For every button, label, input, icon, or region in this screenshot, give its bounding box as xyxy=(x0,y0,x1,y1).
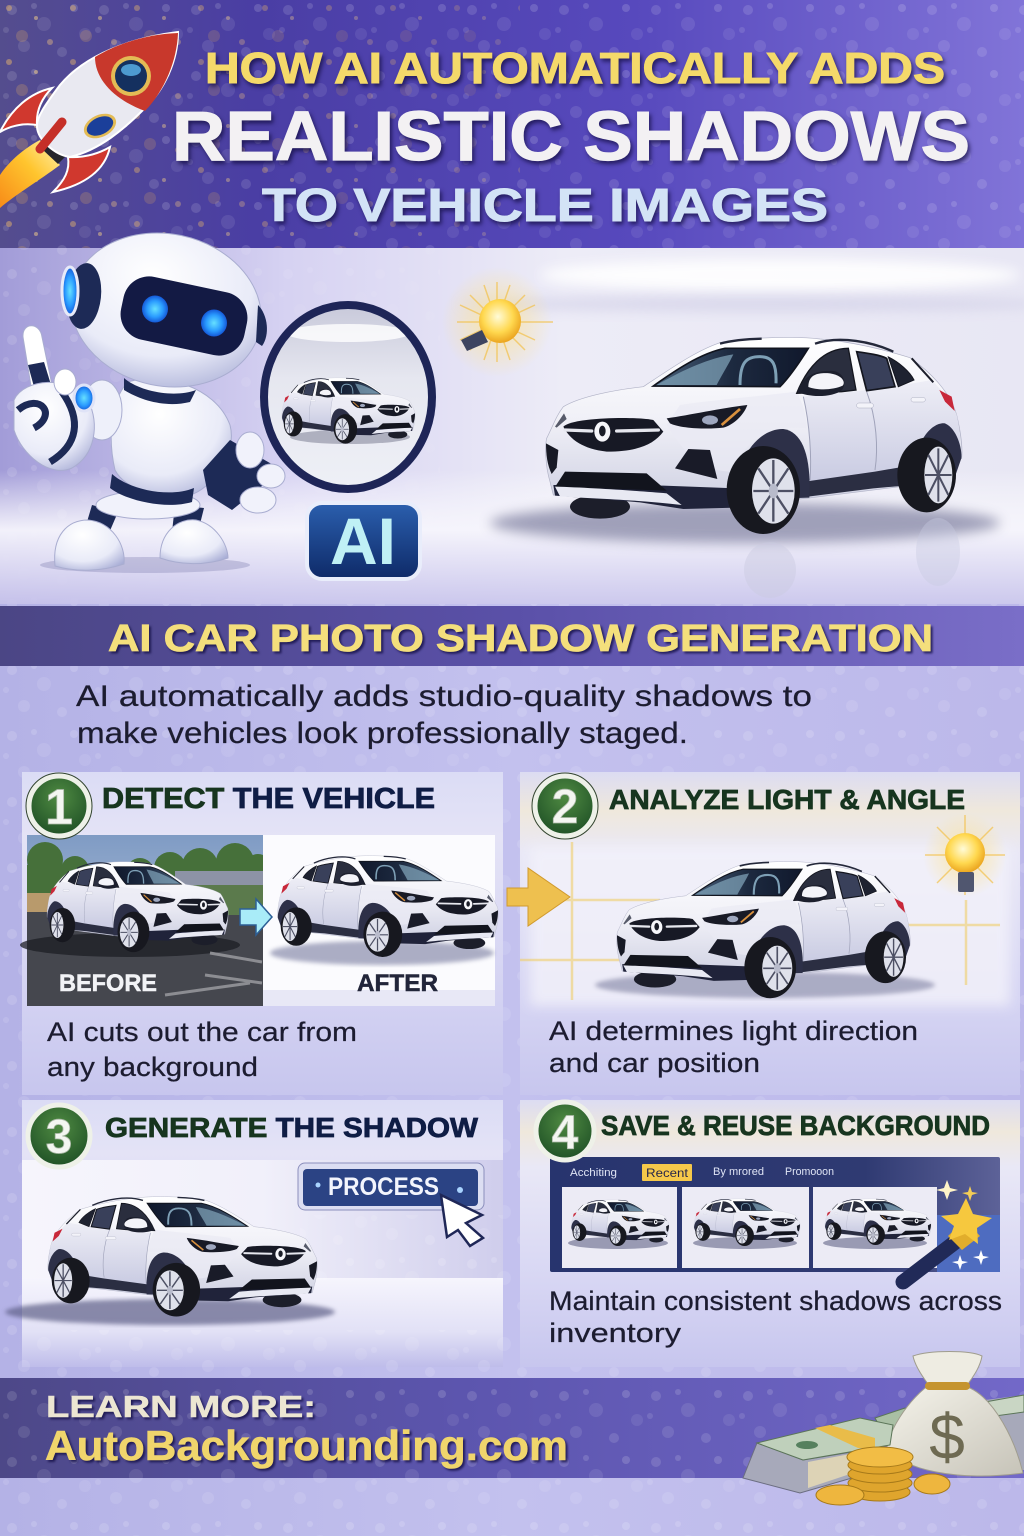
section banner: AI CAR PHOTO SHADOW GENERATION xyxy=(108,618,933,660)
step 2 description: and car position xyxy=(549,1048,760,1078)
header band xyxy=(0,0,1024,248)
robot waist xyxy=(110,474,194,505)
light guide lines xyxy=(520,842,1010,1006)
icon: cash and coins with money bag xyxy=(743,1352,1024,1505)
step 2 description xyxy=(549,1016,918,1078)
step 2 description: AI determines light direction xyxy=(549,1016,918,1046)
panel: step 2 xyxy=(507,772,1020,1095)
call to action text xyxy=(45,1389,568,1469)
illustration: robot xyxy=(14,216,285,573)
tabs: Promooon xyxy=(785,1166,834,1178)
step 1 description xyxy=(47,1017,357,1082)
gold coins xyxy=(816,1447,950,1505)
car: hero vehicle xyxy=(546,337,962,534)
step 2 badge: 2 xyxy=(552,781,578,834)
icon: cursor xyxy=(441,1195,483,1246)
step 3 heading: GENERATE THE SHADOW xyxy=(105,1112,479,1143)
intro text: make vehicles look professionally staged. xyxy=(77,717,688,750)
background library UI xyxy=(550,1157,1000,1272)
decorative bokeh in hero xyxy=(3,248,108,477)
panel: step 1 xyxy=(20,772,503,1095)
icon: light bulb with rays xyxy=(442,267,553,377)
call to action text: AutoBackgrounding.com xyxy=(45,1422,568,1469)
before photo: BEFORE xyxy=(59,970,157,997)
section banner xyxy=(0,606,1024,666)
step 3 badge: 3 xyxy=(46,1111,72,1164)
robot right hand xyxy=(203,432,285,513)
call to action text: LEARN MORE: xyxy=(46,1389,316,1424)
step 4 description: inventory xyxy=(549,1318,682,1348)
step 4 description: Maintain consistent shadows across xyxy=(549,1286,1002,1316)
badge: AI: AI xyxy=(330,504,396,578)
step 1 badge: 1 xyxy=(45,779,73,835)
arrow: gold xyxy=(507,868,570,926)
title: HOW AI AUTOMATICALLY ADDS xyxy=(205,44,945,93)
shadow under car xyxy=(5,1299,335,1325)
tabs: Acchiting xyxy=(570,1167,617,1179)
after photo xyxy=(263,835,498,1006)
car: step 2 xyxy=(617,862,910,998)
panel: hero scene xyxy=(0,248,1024,604)
icon: magic wand xyxy=(903,1180,992,1282)
step 4 badge xyxy=(536,1102,594,1160)
step 3 badge xyxy=(28,1105,90,1167)
back cash stack xyxy=(875,1395,1024,1470)
icon: bulb xyxy=(923,813,1007,897)
intro text xyxy=(76,680,812,750)
car: step 3 xyxy=(48,1197,317,1317)
intro text: AI automatically adds studio-quality shadows to xyxy=(76,680,812,713)
money bag: $ xyxy=(929,1401,965,1473)
icon: magnifying glass with car xyxy=(264,305,432,489)
badge: AI xyxy=(307,503,420,579)
front cash stack xyxy=(743,1418,893,1493)
footer band xyxy=(0,1378,1024,1478)
step 2 badge xyxy=(532,773,598,839)
process button: PROCESS xyxy=(328,1173,439,1201)
title: REALISTIC SHADOWS xyxy=(172,97,970,175)
panel: step 3 xyxy=(5,1100,503,1367)
step 4 badge: 4 xyxy=(552,1107,579,1160)
robot pointing arm xyxy=(14,326,122,470)
step 1 description: AI cuts out the car from xyxy=(47,1017,357,1047)
icon: rocket xyxy=(0,32,178,208)
before photo xyxy=(20,835,272,1006)
robot legs and feet xyxy=(55,491,228,570)
money bag xyxy=(887,1352,1023,1476)
tabs xyxy=(570,1164,834,1181)
thumbnail 3 xyxy=(813,1187,937,1268)
arrow: before to after xyxy=(240,899,272,935)
robot neck xyxy=(124,378,196,404)
step 4 description xyxy=(549,1286,1002,1348)
tabs: Recent xyxy=(646,1168,689,1180)
panel: step 4 xyxy=(520,1100,1020,1367)
tabs: By mrored xyxy=(713,1166,764,1178)
step 1 description: any background xyxy=(47,1052,258,1082)
step 4 heading: SAVE & REUSE BACKGROUND xyxy=(601,1110,990,1141)
step 1 heading: DETECT THE VEHICLE xyxy=(102,783,435,815)
thumbnail 1 xyxy=(562,1187,677,1268)
after photo: AFTER xyxy=(357,970,438,997)
title xyxy=(172,44,970,231)
step 1 badge xyxy=(26,773,92,839)
process button xyxy=(298,1163,484,1210)
step 2 heading: ANALYZE LIGHT & ANGLE xyxy=(609,784,965,815)
thumbnail 2 xyxy=(682,1187,809,1268)
robot torso xyxy=(111,379,231,496)
title: TO VEHICLE IMAGES xyxy=(262,179,828,231)
robot head xyxy=(56,216,276,404)
